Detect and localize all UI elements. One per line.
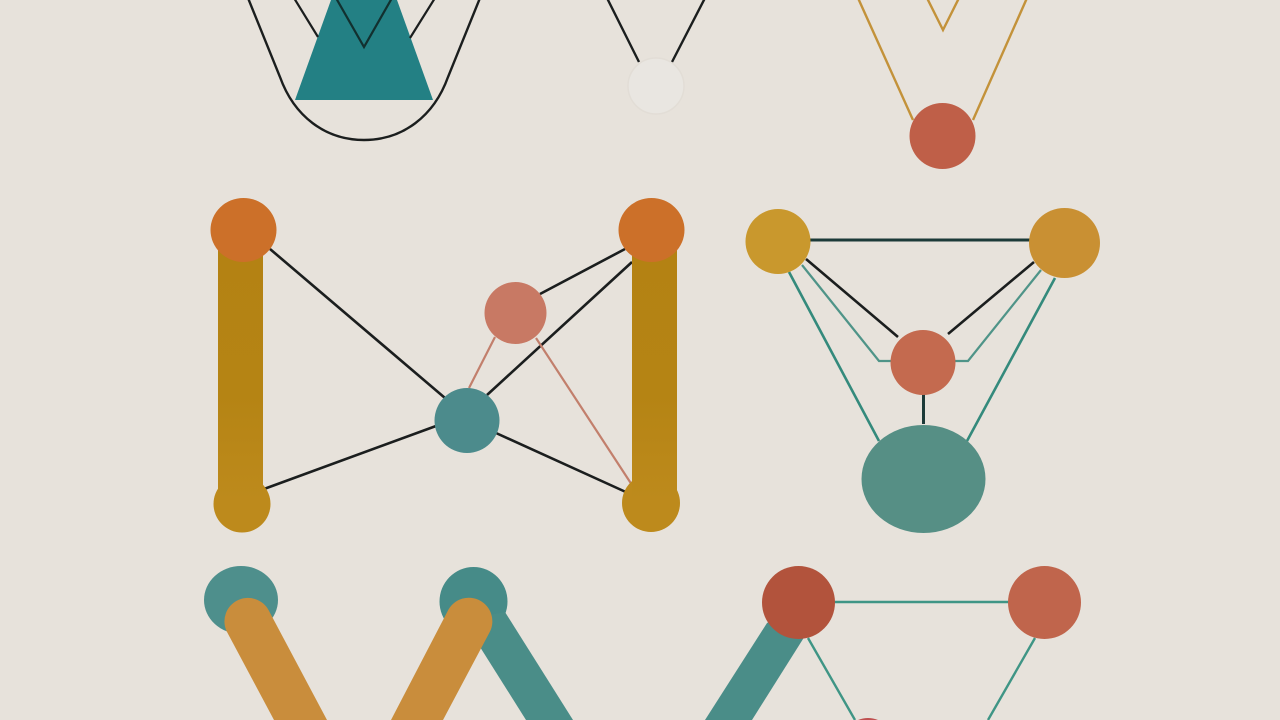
middle-left figure: two pillars and connected nodes [210, 198, 684, 532]
teal centre node [434, 388, 500, 453]
bottom-right figure: red nodes and teal links [705, 566, 1081, 720]
right pillar [632, 240, 677, 500]
left pillar [218, 240, 263, 500]
top-left figure: triangle in arch [248, 0, 480, 140]
bottom-left pillar node [214, 476, 270, 532]
top-middle figure: pale node with lines [607, 0, 705, 114]
pink centre node [484, 282, 546, 344]
top-left pillar node [210, 198, 276, 262]
middle-right figure: triangle network [746, 208, 1100, 533]
bottom-right pillar node [622, 474, 680, 532]
pink connector lines [469, 337, 632, 485]
thin connector lines [264, 249, 632, 493]
top-right figure: ochre V with red node [858, 0, 1027, 169]
top-right pillar node [618, 198, 684, 262]
bottom-left figure: crossing thick bars [204, 566, 573, 720]
